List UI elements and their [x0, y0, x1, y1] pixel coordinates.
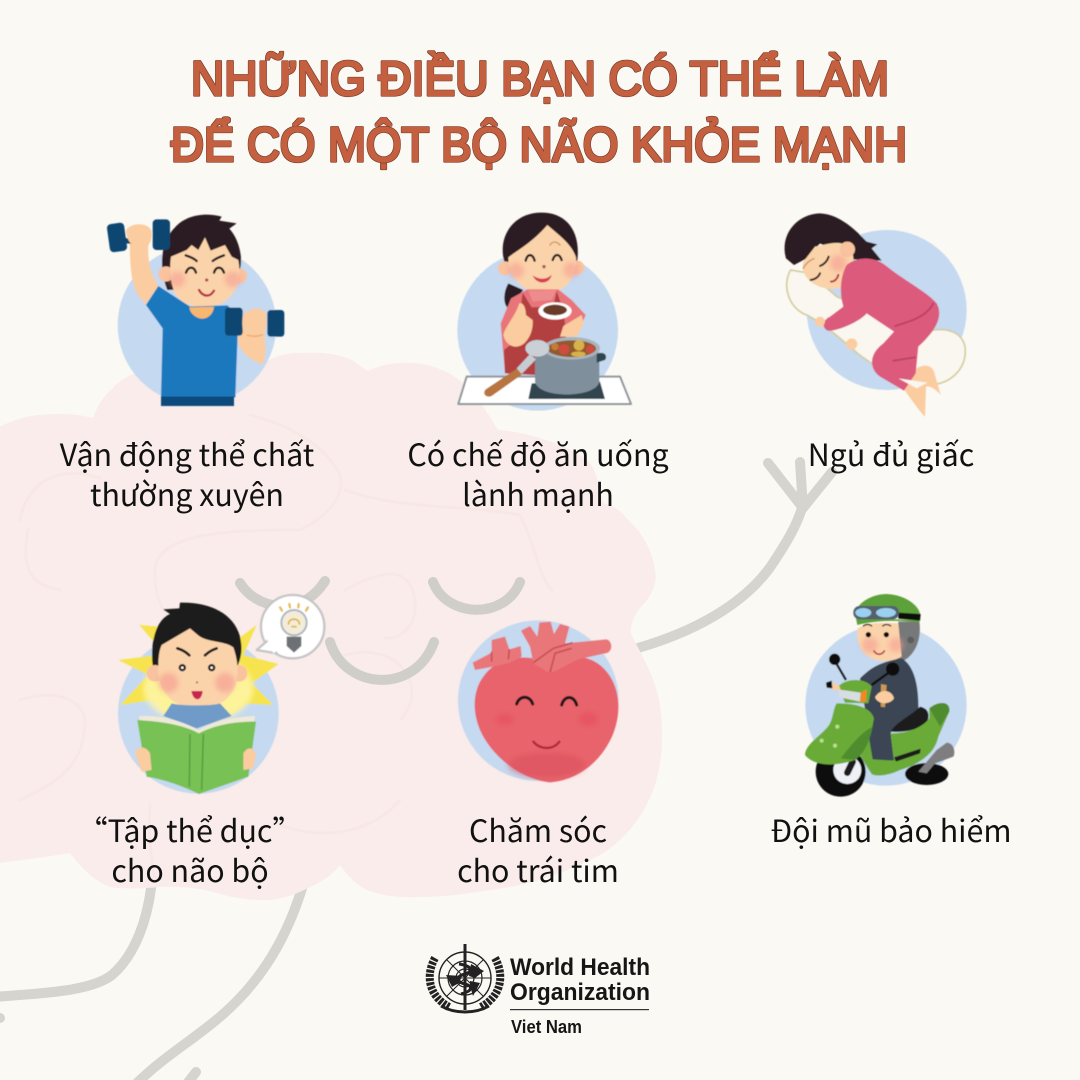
- title: ĐỂ CÓ MỘT BỘ NÃO KHỎE MẠNH: [171, 117, 907, 172]
- brain fold lines: [20, 415, 552, 880]
- emblem: [430, 944, 500, 1012]
- icon: smiling heart: [458, 620, 619, 782]
- icon: boy reading a book with lightbulb idea: [118, 595, 324, 794]
- logo: World Health Organization Viet Nam: Organization: [510, 979, 650, 1006]
- title: [171, 52, 907, 172]
- icon: person riding scooter with helmet: [805, 594, 967, 797]
- label: exercise for the brain: cho não bộ: [111, 847, 269, 891]
- logo: World Health Organization Viet Nam: Viet Nam: [511, 1017, 582, 1037]
- label: exercise for the brain: “Tập thể dục”: [77, 807, 303, 851]
- label: healthy diet: lành mạnh: [462, 471, 614, 515]
- icon: woman sleeping hugging pillow: [785, 213, 967, 417]
- label: care for the heart: cho trái tim: [457, 847, 619, 891]
- label: care for the heart: Chăm sóc: [469, 807, 607, 851]
- background: gray stick limbs of brain character: [0, 462, 832, 1080]
- logo: World Health Organization Viet Nam: World Health: [510, 954, 650, 981]
- label: wear a helmet: Đội mũ bảo hiểm: [770, 807, 1012, 851]
- background: pink brain character: [0, 353, 662, 900]
- icon: man exercising with dumbbells: [106, 215, 284, 406]
- label: healthy diet: Có chế độ ăn uống: [407, 431, 669, 475]
- label: physical activity: Vận động thể chất: [60, 431, 314, 475]
- label: enough sleep: Ngủ đủ giấc: [808, 431, 974, 475]
- icon: woman cooking: [457, 213, 631, 411]
- label: physical activity: thường xuyên: [90, 471, 284, 515]
- logo: World Health Organization Viet Nam: [430, 944, 650, 1037]
- background: face arcs of brain character: [240, 581, 520, 680]
- title: NHỮNG ĐIỀU BẠN CÓ THỂ LÀM: [191, 52, 889, 106]
